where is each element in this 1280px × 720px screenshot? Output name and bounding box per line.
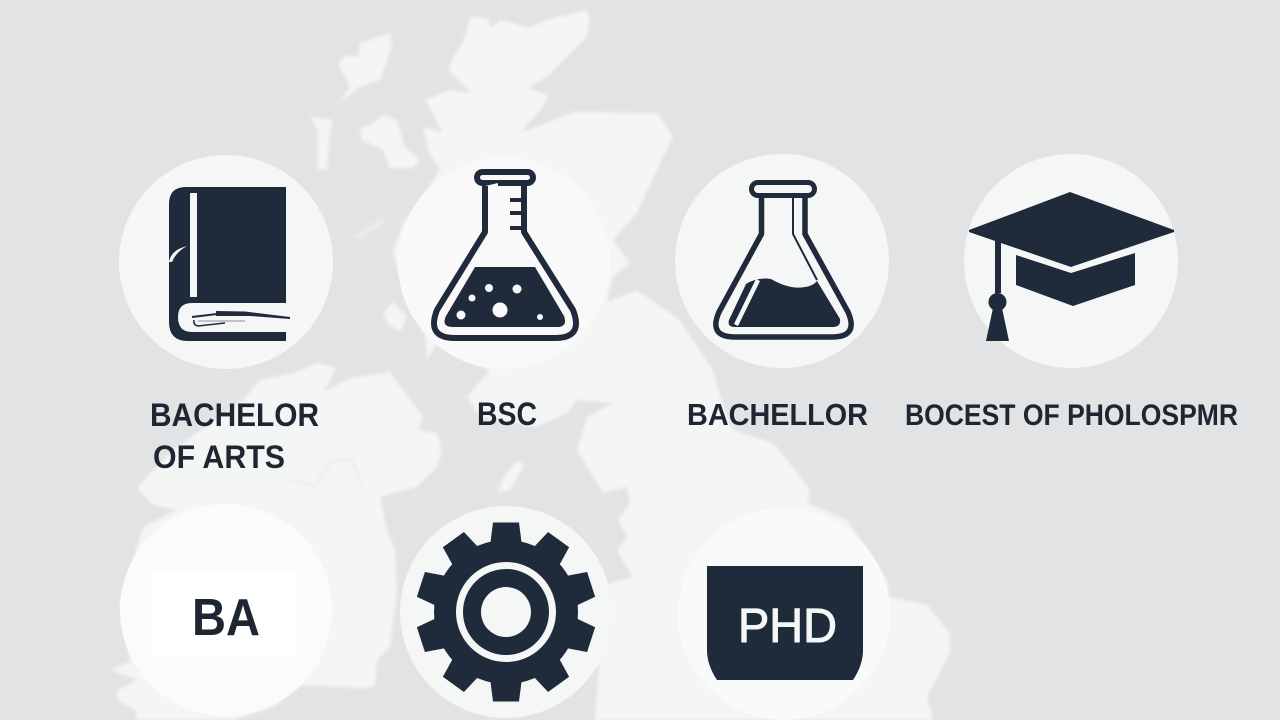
icon: graduation cap bbox=[969, 192, 1174, 341]
label: bachelor of arts: OF ARTS bbox=[153, 439, 285, 475]
label: garbled philosophy degree: BOCEST OF PHOLOSPMR bbox=[905, 399, 1238, 432]
panel: doctor of philosophy bbox=[905, 154, 1238, 432]
panel: gear bbox=[400, 506, 612, 718]
panel: bachellor bbox=[675, 154, 889, 432]
icon: gear bbox=[416, 522, 596, 702]
label: bachelor of arts: BACHELOR bbox=[150, 397, 319, 433]
map: Ireland bbox=[110, 363, 442, 720]
icon: ba badge: BA bbox=[192, 589, 260, 647]
background map of the British Isles bbox=[110, 10, 950, 720]
map: small island bbox=[353, 217, 385, 240]
panel: phd bbox=[678, 508, 890, 720]
map: Uists bbox=[310, 117, 333, 170]
label: bsc: BSC bbox=[477, 396, 537, 432]
icon: flask with liquid bbox=[716, 182, 851, 337]
icon: book bbox=[169, 187, 290, 341]
map: Northern Ireland border bbox=[290, 459, 363, 487]
panel: bsc bbox=[398, 157, 610, 432]
label: bachelor of arts bbox=[150, 397, 319, 475]
panel: bachelor of arts bbox=[119, 155, 333, 475]
icon: phd badge bbox=[707, 566, 863, 680]
panel: ba bbox=[120, 504, 332, 716]
map: Great Britain bbox=[393, 10, 950, 720]
label: bachellor: BACHELLOR bbox=[687, 397, 868, 432]
icon: conical flask with bubbles bbox=[434, 172, 576, 338]
icon: phd badge: PHD bbox=[738, 600, 837, 653]
icon: ba badge bbox=[152, 573, 296, 657]
map: Arran bbox=[383, 302, 407, 332]
map: Skye bbox=[360, 115, 420, 168]
map: Isle of Man bbox=[497, 460, 525, 492]
map: Lewis bbox=[337, 33, 392, 105]
